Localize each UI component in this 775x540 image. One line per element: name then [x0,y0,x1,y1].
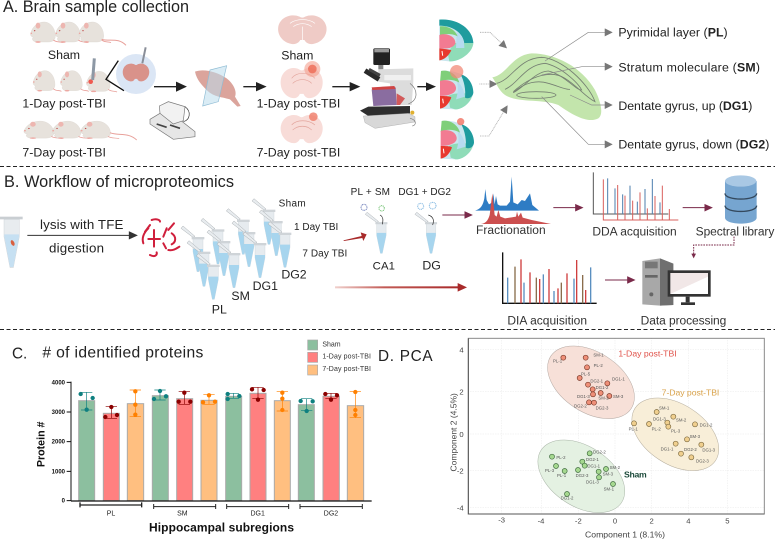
cluster: 1-day post-TBI [534,331,677,434]
subregion brackets [80,502,362,509]
label: PL: Pyrimidal layer (PL) [618,26,728,40]
7-day slice label: 7-Day post-TBI [257,146,340,160]
arrow [553,205,582,211]
red arrow [343,232,367,241]
PL label: PL [212,302,227,316]
icon: computer [642,258,711,306]
sham slice label: Sham [281,48,313,62]
x tick labels: 0 [613,516,617,525]
DG1 + DG2 label: DG1 + DG2 [398,187,451,198]
panel C: identified proteins bar chart [12,340,372,535]
icon: database [725,175,757,224]
sample preparation [0,187,467,316]
leader lines [542,32,606,144]
cluster: 7-day post-TBI: SM-2 [676,417,687,422]
cluster: 1-day post-TBI: DG2-1 [590,378,604,383]
data points: 1-day [103,387,339,419]
long red arrow [335,283,467,292]
y axis title: Protein # [35,421,47,467]
7-day atlas section [441,118,474,159]
subregion labels: SM [177,510,188,517]
cluster: 7-day post-TBI: PL-2 [652,427,661,432]
data points: 7-day [133,389,357,417]
subregion labels: PL [107,510,115,517]
y tick labels: -4 [457,503,464,512]
DG2 label: DG2 [281,268,307,282]
dashed connector [691,237,734,258]
cluster: sham: DG2-3 [576,473,589,478]
sham label: Sham [48,48,80,62]
sham coronal slice [278,15,327,44]
lysis label: lysis with TFE [40,217,123,232]
cluster: sham: Sham [624,470,647,480]
arrow [417,83,434,90]
D heading: D. PCA [378,348,433,365]
cluster: 7-day post-TBI: DG1-3 [653,416,666,421]
cluster: 1-day post-TBI: DG2-3 [596,405,609,410]
digestion label: digestion [49,241,104,256]
label: DG1: Dentate gyrus, up (DG1) [618,99,752,113]
error bars: 1-day [106,387,337,418]
y axis [52,380,71,505]
panel D: PCA scatter plot [378,331,764,539]
DIA spectrum [503,252,597,303]
heading B: B. Workflow of microproteomics [4,173,234,191]
7-day label: 7-Day post-TBI [22,146,106,160]
DIA label: DIA acquisition [507,314,587,328]
label: DG2: Dentate gyrus, down (DG2) [618,137,769,151]
1-day injured slice [281,61,323,98]
y axis: 0 [62,499,66,505]
1-day atlas section [440,65,473,109]
cluster: 7-day post-TBI [619,383,732,486]
cluster: sham: PL-3 [545,468,555,473]
cluster: sham: PL-2 [556,455,566,460]
C label: C. [12,345,27,362]
cluster: 7-day post-TBI: SM-3 [690,434,701,439]
legend: 7-Day post-TBI [322,366,371,373]
arrow [154,83,185,91]
7-day injured slice [281,112,323,143]
cluster: 1-day post-TBI: DG1-1 [612,377,625,382]
x tick labels: -4 [538,516,545,525]
chart title: # of identified proteins [42,344,204,361]
sham mice [30,22,126,45]
icon: microscope [360,48,416,128]
SM tubes [201,218,240,288]
x tick labels: 5 [725,516,729,525]
y axis: 4000 [52,380,66,386]
1 day condition label: 1 Day TBI [294,222,338,233]
1-day label: 1-Day post-TBI [22,96,106,110]
x axis title: Hippocampal subregions [149,521,294,535]
cluster: 7-day post-TBI: DG2-2 [684,447,697,452]
y tick labels: 2 [459,388,464,397]
data processing label: Data processing [641,314,726,328]
y axis: 1000 [52,469,66,475]
arrow [243,83,265,90]
cluster: sham: DG2-1 [586,457,599,462]
icon: vibratome [150,102,195,139]
x tick labels: 2 [650,516,654,525]
cluster: 1-day post-TBI: SM-2 [598,395,609,400]
1-day mice with injury needle [33,58,117,92]
1-day slice label: 1-Day post-TBI [257,96,340,110]
x tick labels: -3 [498,515,505,524]
subregion labels: DG1 [250,510,265,517]
cluster: 1-day post-TBI: DG1-2 [596,385,609,390]
hippocampus diagram [492,53,601,120]
x tick labels: -2 [575,516,582,525]
magnified injury site [106,47,156,94]
subregion labels: DG2 [324,510,338,517]
icon: whole brain with slicing plane [195,66,241,107]
cluster: sham: SM-1 [604,486,615,491]
label: SM: Stratum moleculare (SM) [618,60,760,74]
cluster: 7-day post-TBI: SM-1 [659,405,670,410]
arrow [605,277,634,283]
cluster: sham: SM-3 [603,471,614,476]
cluster: 7-day post-TBI: DG2-3 [696,458,709,463]
proteomics acquisition [398,172,774,328]
y axis: 3000 [52,410,66,416]
arrow [442,212,472,218]
cluster: 7-day post-TBI: PL-3 [671,428,681,433]
cluster: 7-day post-TBI: DG1-2 [700,422,713,427]
mice and brain processing illustrations [22,15,416,160]
DG label: DG [422,258,441,272]
subregion labels [107,510,338,517]
error bars: 7-day [130,390,361,418]
DDA spectrum [593,172,678,220]
cluster: sham [525,425,647,528]
y tick labels: 4 [459,345,464,354]
plot frame and grid [468,338,764,514]
CA1 label: CA1 [373,260,395,272]
DG tube [415,202,437,253]
cluster: sham: DG1-3 [586,479,599,484]
sham condition label: Sham [279,199,306,210]
arrow [27,232,137,239]
legend: Sham [322,341,341,348]
DDA label: DDA acquisition [592,225,677,239]
cluster: 7-day post-TBI: PL-1 [629,427,638,432]
dotted arrows to hippocampus [479,32,504,136]
fractionation chromatogram [475,177,551,224]
y tick labels: 0 [459,430,464,439]
SM label: SM [231,289,250,303]
cluster: 1-day post-TBI: 1-Day post-TBI [618,349,677,359]
hippocampus region diagrams [417,19,769,159]
x axis [71,499,372,503]
cluster: 7-day post-TBI: 7-Day post-TBI [662,388,719,398]
y tick labels [457,345,464,512]
spectral library label: Spectral library [696,225,774,239]
cluster: 7-day post-TBI: DG1-3 [702,448,716,453]
DG1 label: DG1 [253,279,278,293]
arrow [683,205,712,211]
cluster: 1-day post-TBI: PL-5 [581,372,591,377]
7 day condition label: 7 Day TBI [302,249,347,260]
cluster: 1-day post-TBI: DG1-3 [577,394,590,399]
cluster: 7-day post-TBI: DG1-1 [661,446,674,451]
y axis title: Component 2 (4.5%) [448,393,458,471]
data points: sham [78,389,315,413]
cluster: 1-day post-TBI: PL-2 [594,363,603,368]
x tick labels [498,515,729,525]
cluster: sham: PL-1 [557,473,567,478]
error bars: sham [81,390,312,410]
DG1 tubes [226,209,266,278]
legend: 1-Day post-TBI [322,354,371,361]
PL + SM label: PL + SM [351,187,390,198]
cluster: sham: DG1-2 [561,495,574,500]
panel B: workflow of microproteomics [0,172,774,328]
cluster: sham: DG1-1 [587,463,601,468]
legend [308,340,371,375]
cluster: sham: SM-2 [610,465,621,470]
x tick labels: 4 [686,516,691,525]
icon: sample tube [0,217,23,268]
cluster: 1-day post-TBI: SM-3 [613,394,624,399]
y tick labels: -2 [457,467,464,476]
cluster: 1-day post-TBI: PL-1 [553,359,563,364]
cluster: 1-day post-TBI: SM-1 [593,352,604,357]
y axis: 2000 [52,440,66,446]
panel A: brain sample collection [3,0,769,160]
cluster: sham: DG2-2 [593,449,606,454]
icon: peptides [143,219,179,256]
fractionation label: Fractionation [476,223,546,237]
x axis title: Component 1 (8.1%) [585,529,665,539]
sham atlas section [439,19,473,61]
arrow [332,83,359,90]
CA1 tube [361,204,387,253]
PL tubes [181,226,220,299]
bars [79,393,364,501]
cluster: 1-day post-TBI: DG2-2 [574,403,587,408]
7-day mice [24,121,137,140]
DG2 tubes [252,199,291,267]
